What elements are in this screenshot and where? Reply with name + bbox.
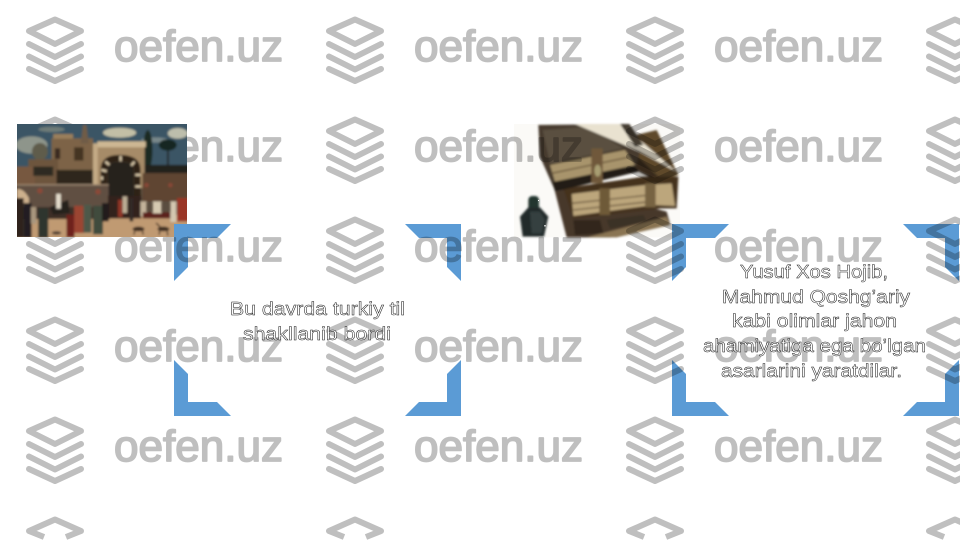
gate [93, 145, 144, 188]
animals [133, 227, 144, 231]
panel: right corner frame [672, 224, 959, 416]
text block: left panel [230, 299, 405, 344]
watermark pattern: oefen.uz [714, 222, 883, 271]
right small book [636, 130, 678, 182]
text block: left panel: Bu davrda turkiy til [230, 299, 405, 319]
text block: right panel: asarlarini yaratdilar. [721, 361, 902, 381]
trees [143, 130, 152, 170]
watermark pattern: oefen.uz [414, 222, 583, 271]
text block: right panel: kabi olimlar jahon [732, 311, 897, 331]
watermark pattern: oefen.uz [414, 122, 583, 171]
watermark pattern: oefen.uz [414, 22, 583, 71]
quill [575, 124, 676, 172]
text block: right panel: ahamiyatiga ega bo’lgan [703, 336, 926, 356]
watermark pattern: oefen.uz [714, 422, 883, 471]
inkwell [528, 196, 539, 211]
image: old books and inkwell [514, 124, 680, 237]
crowd [108, 196, 141, 218]
middle book [563, 177, 678, 218]
watermark pattern: oefen.uz [114, 22, 283, 71]
right wall [143, 173, 191, 201]
watermark pattern: oefen.uz [114, 422, 283, 471]
watermark pattern: oefen.uz [114, 222, 283, 271]
watermark pattern: oefen.uz [414, 422, 583, 471]
bottom book [555, 187, 670, 237]
watermark pattern: oefen.uz [714, 122, 883, 171]
watermark pattern: oefen.uz [114, 322, 283, 371]
top book [538, 124, 642, 191]
panel: left corner frame [174, 224, 461, 416]
watermark pattern: oefen.uz [114, 122, 283, 171]
left buildings [52, 138, 93, 183]
text block: right panel: Mahmud Qoshg’ariy [722, 287, 910, 307]
lower wall [12, 185, 109, 210]
text block: right panel [703, 262, 926, 381]
text block: right panel: Yusuf Xos Hojib, [740, 262, 888, 282]
watermark pattern: oefen.uz [714, 22, 883, 71]
watermark pattern: oefen.uz [414, 322, 583, 371]
text block: left panel: shakllanib bordi [243, 324, 391, 344]
ground [12, 215, 191, 241]
watermark pattern: oefen.uz [714, 322, 883, 371]
image: historic city painting [12, 120, 191, 241]
